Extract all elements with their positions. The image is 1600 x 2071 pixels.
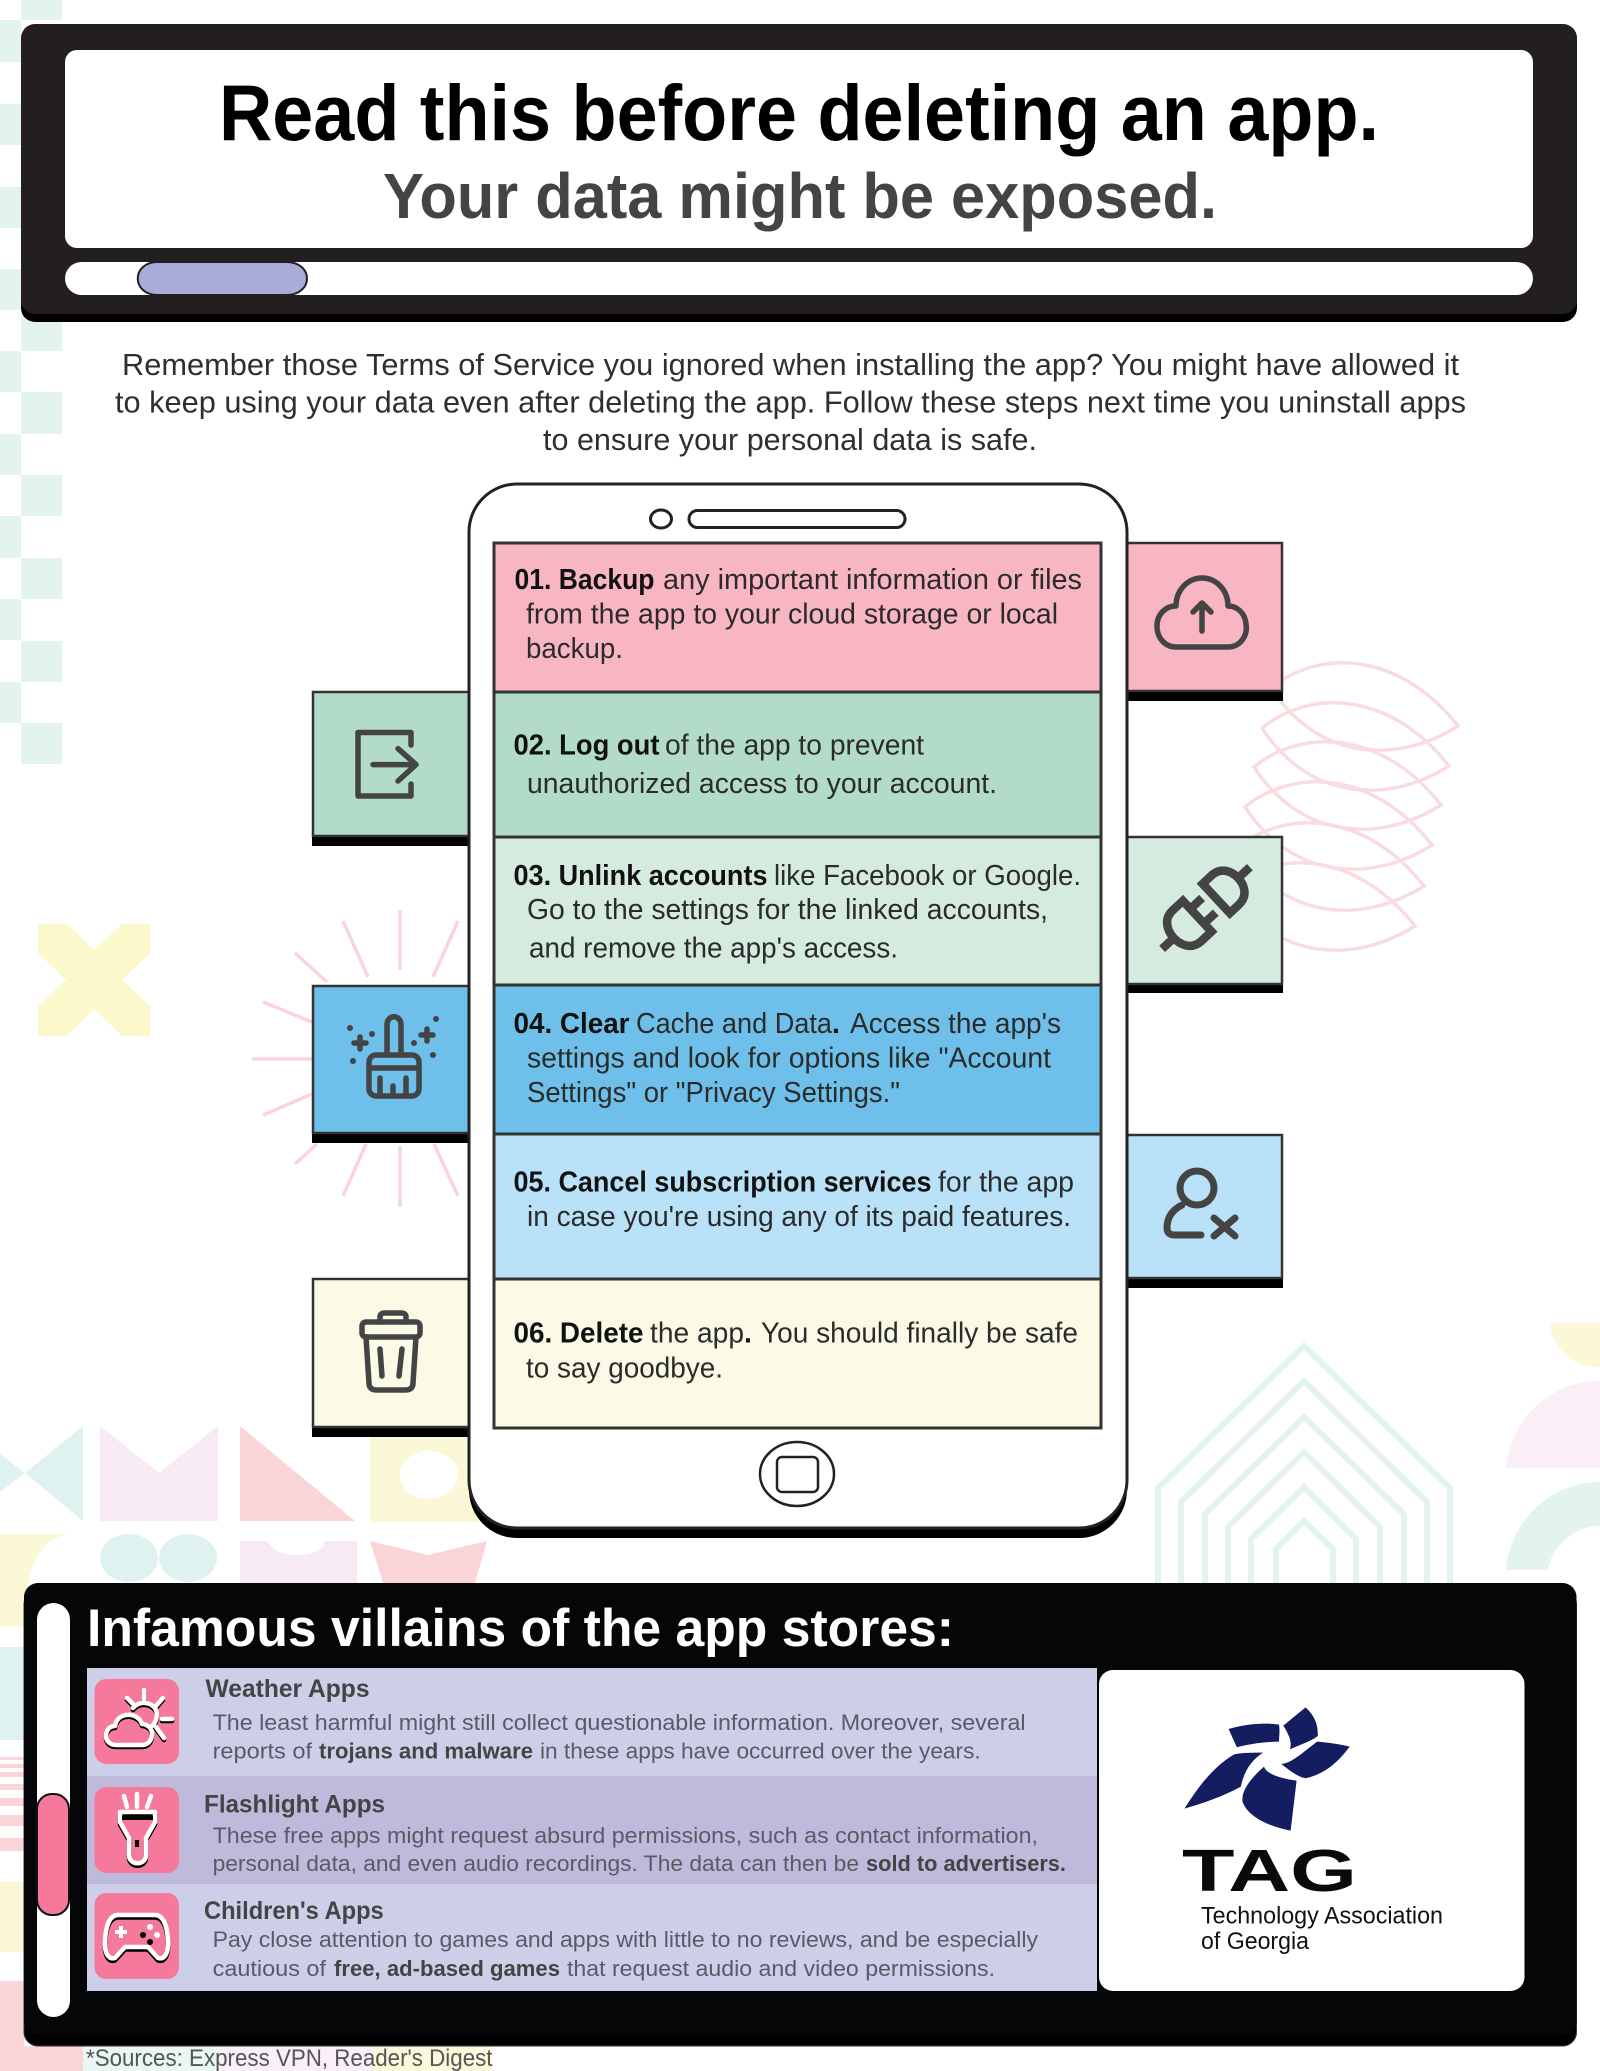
step 3: Go to the settings for the linked accounts, xyxy=(527,894,1048,926)
step 2: of the app to prevent xyxy=(665,730,924,762)
row: children's apps: free, ad-based games xyxy=(334,1956,560,1981)
step 3 xyxy=(494,837,1101,985)
step 5: in case you're using any of its paid features. xyxy=(527,1201,1071,1233)
header panel xyxy=(21,24,1577,322)
logo tagline: Technology Association xyxy=(1201,1902,1443,1930)
step 4: 04. Clear xyxy=(514,1008,630,1040)
row: weather apps: reports of xyxy=(213,1739,313,1764)
panel heading: Infamous villains of the app stores: xyxy=(87,1599,954,1658)
step 5: 05. Cancel subscription services xyxy=(514,1167,932,1199)
row: flashlight apps: These free apps might request absurd permissions, such as contact information, xyxy=(213,1823,1038,1848)
phone home button xyxy=(760,1442,834,1506)
phone speaker xyxy=(689,510,905,528)
step 6: the app xyxy=(650,1318,744,1350)
icon: gamepad xyxy=(94,1893,179,1979)
background: yellow X xyxy=(38,924,150,1036)
row: children's apps: cautious of xyxy=(213,1956,327,1981)
horizontal scrollbar track xyxy=(65,262,1533,295)
horizontal scrollbar thumb xyxy=(138,262,307,295)
intro paragraph: Remember those Terms of Service you ignored when installing the app? You might have allowed it xyxy=(122,348,1460,382)
row: children's apps xyxy=(87,1884,1097,1991)
background: geometric shapes lower left xyxy=(0,1426,492,2071)
step 2: 02. Log out xyxy=(514,730,660,762)
background: shapes lower right xyxy=(1506,1323,1600,1570)
step 6: . xyxy=(744,1318,752,1350)
row: weather apps: in these apps have occurred over the years. xyxy=(540,1739,981,1764)
logo card xyxy=(1099,1670,1524,1991)
row: weather apps xyxy=(87,1668,1097,1776)
icon: TAG star logo xyxy=(1184,1707,1350,1831)
icon: brush with sparkles xyxy=(347,1016,439,1096)
step 3: and remove the app's access. xyxy=(529,932,898,964)
step 4: . xyxy=(832,1008,840,1040)
step 3: like Facebook or Google. xyxy=(774,860,1081,892)
row: children's apps: that request audio and video permissions. xyxy=(567,1956,995,1981)
logo tagline: of Georgia xyxy=(1201,1928,1309,1955)
subtitle: Your data might be exposed. xyxy=(383,160,1217,232)
title: Read this before deleting an app. xyxy=(219,68,1379,157)
row: flashlight apps: sold to advertisers. xyxy=(866,1851,1066,1876)
side tab: cancel subscription xyxy=(1127,1134,1283,1288)
step 4: Access the app's xyxy=(850,1008,1061,1040)
icon: flashlight xyxy=(94,1787,179,1873)
phone xyxy=(469,484,1127,1538)
title card xyxy=(65,50,1533,248)
vertical scrollbar track xyxy=(37,1603,70,2017)
intro paragraph: to keep using your data even after deleting the app. Follow these steps next time you uninstall apps xyxy=(115,386,1466,420)
row: weather apps: The least harmful might still collect questionable information. Moreover, several xyxy=(213,1710,1026,1735)
row: flashlight apps xyxy=(87,1776,1097,1884)
step 6 xyxy=(494,1279,1101,1428)
side tab: log out xyxy=(312,691,469,846)
row: children's apps: Children's Apps xyxy=(204,1897,384,1925)
row: weather apps: Weather Apps xyxy=(206,1675,370,1703)
row: flashlight apps: Flashlight Apps xyxy=(204,1791,385,1819)
phone camera xyxy=(650,510,672,528)
step 4: Settings" or "Privacy Settings." xyxy=(527,1077,900,1109)
icon: weather xyxy=(94,1679,179,1764)
step 4 xyxy=(494,985,1101,1134)
step 1: 01. Backup xyxy=(514,564,654,596)
vertical scrollbar thumb xyxy=(37,1794,69,1915)
step 3: 03. Unlink accounts xyxy=(514,860,768,892)
background: pink lens stack xyxy=(1228,663,1458,950)
side tab: delete xyxy=(312,1278,469,1437)
icon: cloud upload xyxy=(1157,578,1246,647)
icon: user remove xyxy=(1167,1171,1235,1236)
step 6: to say goodbye. xyxy=(526,1353,723,1385)
villains panel xyxy=(24,1583,1576,2046)
step 1: from the app to your cloud storage or local xyxy=(526,599,1058,631)
step 1: any important information or files xyxy=(663,564,1082,596)
icon: trash can xyxy=(362,1313,420,1390)
step 4: Cache and Data xyxy=(636,1008,832,1040)
step 1 xyxy=(494,543,1101,692)
step 4: settings and look for options like "Account xyxy=(527,1043,1051,1075)
step 2: unauthorized access to your account. xyxy=(527,768,997,800)
background: concentric house outline xyxy=(1158,1346,1450,1583)
step 6: You should finally be safe xyxy=(761,1318,1078,1350)
step 6: 06. Delete xyxy=(514,1318,644,1350)
logo wordmark: TAG xyxy=(1182,1838,1357,1904)
side tab: cloud backup xyxy=(1127,542,1283,701)
step 5: for the app xyxy=(938,1167,1074,1199)
background: checker pattern xyxy=(0,0,62,764)
side tab: unlink xyxy=(1127,836,1283,993)
icon: log out xyxy=(358,732,416,796)
side tab: clear cache xyxy=(312,985,469,1143)
step 1: backup. xyxy=(526,633,623,665)
step 5 xyxy=(494,1134,1101,1279)
row: weather apps: trojans and malware xyxy=(319,1739,533,1764)
intro paragraph: to ensure your personal data is safe. xyxy=(543,423,1037,457)
background: pink sunburst rays xyxy=(252,910,458,1207)
row: flashlight apps: personal data, and even audio recordings. The data can then be xyxy=(213,1851,859,1876)
step 2 xyxy=(494,692,1101,837)
row: children's apps: Pay close attention to games and apps with little to no reviews, and be especially xyxy=(213,1927,1039,1952)
icon: unplugged plug xyxy=(1148,852,1264,964)
